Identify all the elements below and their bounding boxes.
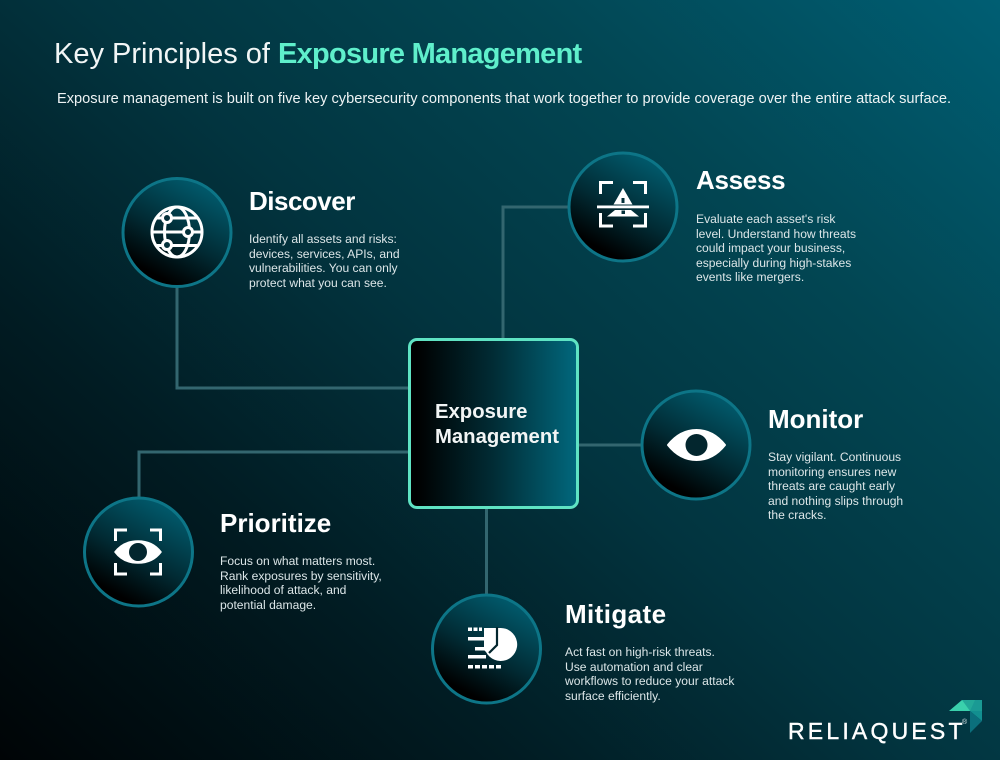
body: Prioritize: Focus on what matters most. (220, 554, 375, 568)
logo mark: ReliaQuest facets (949, 700, 982, 733)
body: Discover: protect what you can see. (249, 276, 387, 290)
body: Prioritize: Rank exposures by sensitivity, (220, 569, 382, 583)
connector: Prioritize to centre (139, 452, 410, 500)
body: Monitor: monitoring ensures new (768, 465, 896, 479)
body: Monitor: threats are caught early (768, 479, 895, 493)
circle icon: Monitor eye (642, 391, 750, 499)
body: Monitor: the cracks. (768, 508, 826, 522)
heading: Monitor: Monitor (768, 404, 863, 434)
connector: Discover to centre (177, 285, 410, 388)
connector: Monitor to centre (576, 444, 644, 446)
centre box label: Exposure (435, 401, 527, 423)
body: Discover: vulnerabilities. You can only (249, 261, 398, 275)
body: Assess: especially during high-stakes (696, 256, 851, 270)
circle icon: Mitigate fast clock (432, 595, 540, 703)
body: Mitigate: surface efficiently. (565, 689, 661, 703)
body: Prioritize (220, 554, 382, 612)
title: Key Principles of Exposure Management (54, 38, 581, 70)
circle icon: Prioritize framed eye (84, 498, 192, 606)
body: Mitigate (565, 645, 734, 703)
heading: Discover: Discover (249, 186, 355, 216)
logo registered mark: ® (962, 719, 967, 726)
intro text: Exposure management is built on five key cybersecurity components that work together to provide coverage over the entire attack surface. (57, 91, 951, 107)
text block: Assess (696, 165, 856, 284)
body: Discover: devices, services, APIs, and (249, 247, 400, 261)
circle icon: Assess warning triangle (569, 153, 677, 261)
text block: Prioritize (220, 508, 382, 612)
body: Prioritize: potential damage. (220, 598, 316, 612)
heading: Assess: Assess (696, 165, 785, 195)
body: Assess: level. Understand how threats (696, 227, 856, 241)
body: Monitor (768, 450, 903, 522)
heading: Prioritize: Prioritize (220, 508, 331, 538)
connector: Mitigate to centre (485, 506, 488, 597)
centre box label (435, 401, 559, 448)
body: Prioritize: likelihood of attack, and (220, 583, 346, 597)
body: Assess: events like mergers. (696, 270, 804, 284)
body: Discover (249, 232, 400, 290)
body: Discover: Identify all assets and risks: (249, 232, 397, 246)
body: Mitigate: Use automation and clear (565, 660, 703, 674)
text block: Mitigate (565, 599, 734, 703)
text block: Discover (249, 186, 400, 290)
body: Assess: could impact your business, (696, 241, 845, 255)
heading: Mitigate: Mitigate (565, 599, 666, 629)
panel: Exposure Management centre box (408, 338, 579, 509)
centre box label: Management (435, 426, 559, 448)
body: Assess: Evaluate each asset's risk (696, 212, 835, 226)
text block: Monitor (768, 404, 903, 522)
body: Assess (696, 212, 856, 284)
body: Monitor: and nothing slips through (768, 494, 903, 508)
body: Monitor: Stay vigilant. Continuous (768, 450, 901, 464)
connector: Assess to centre (503, 207, 571, 340)
logo wordmark: RELIAQUEST (788, 718, 966, 744)
body: Mitigate: workflows to reduce your attack (565, 674, 734, 688)
body: Mitigate: Act fast on high-risk threats. (565, 645, 715, 659)
circle icon: Discover globe (123, 178, 231, 286)
